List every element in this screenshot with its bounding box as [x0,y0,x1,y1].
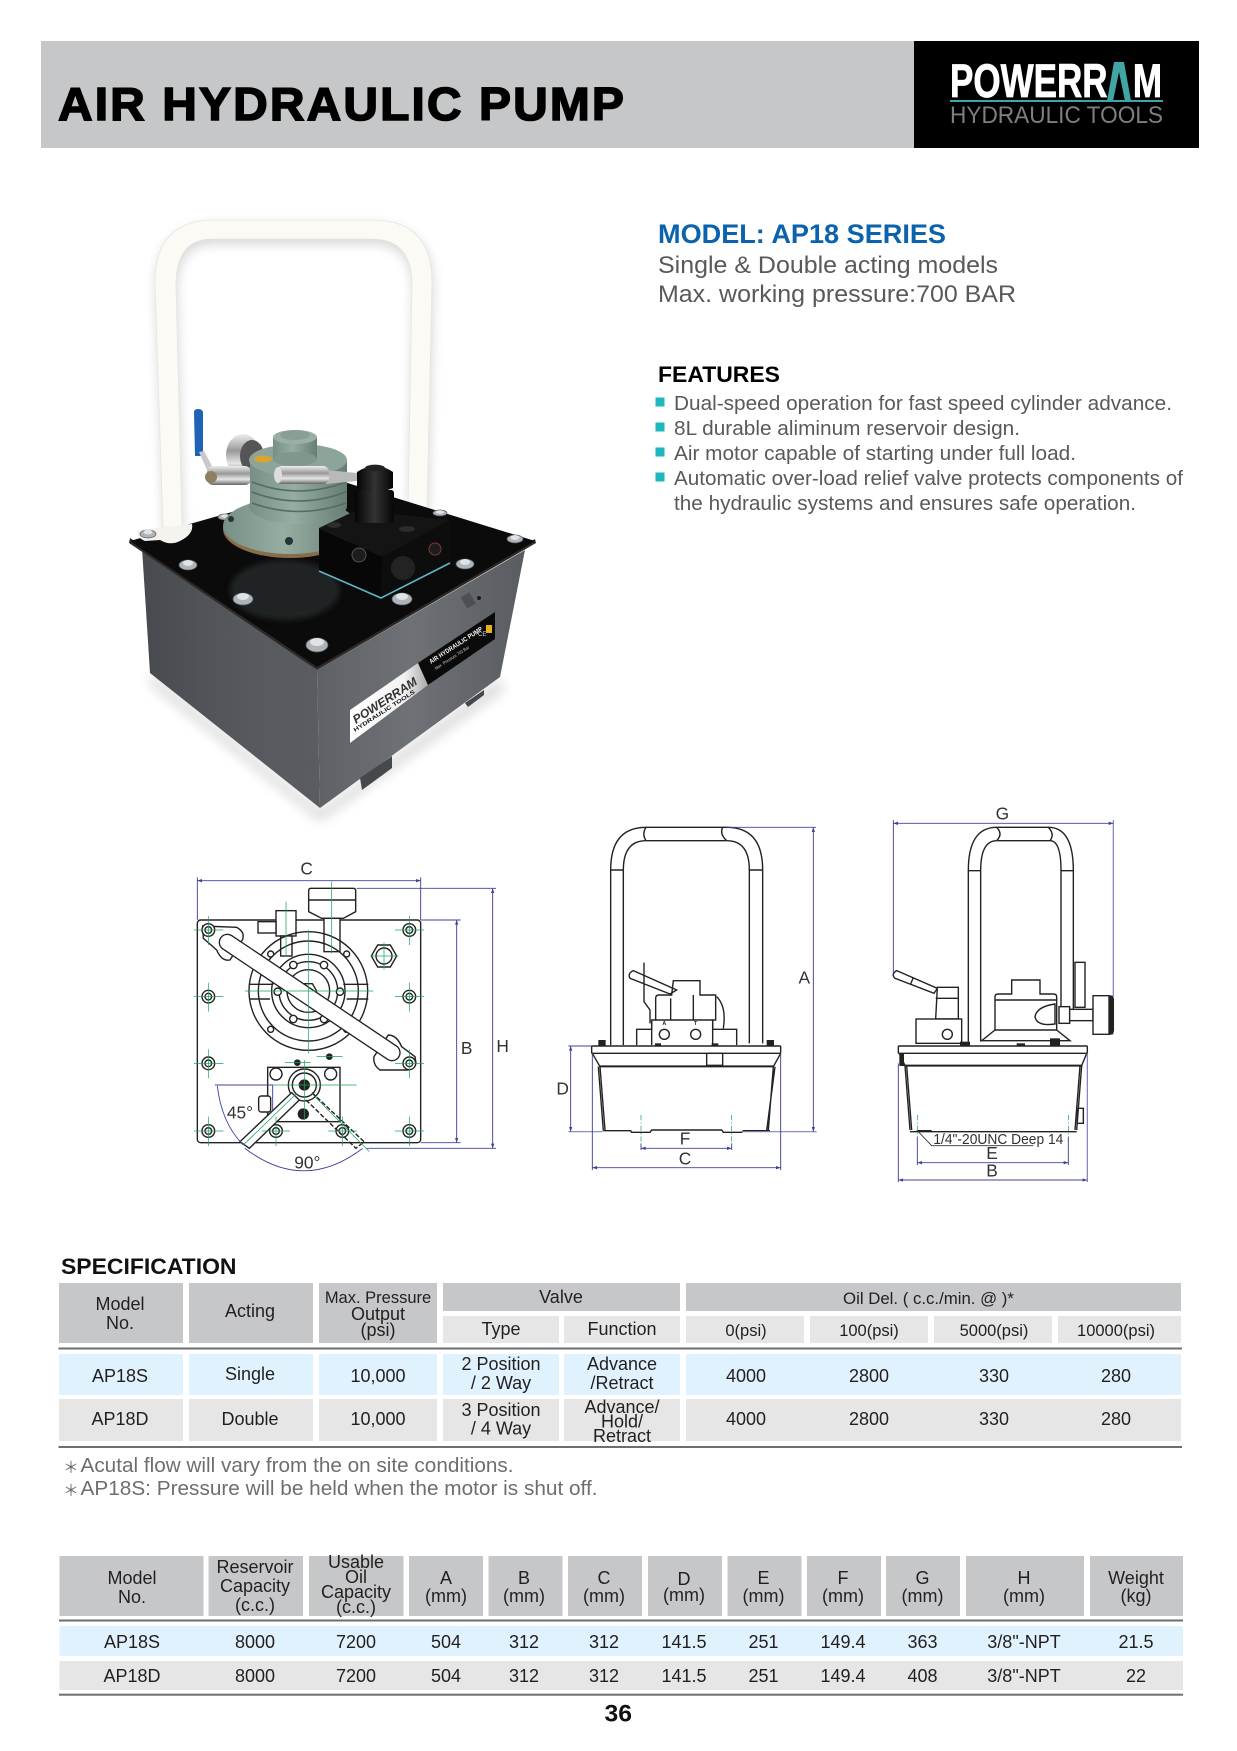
feature text: the hydraulic systems and ensures safe operation. [674,492,1136,515]
row AP18D: 251 [748,1666,779,1686]
blue ball valve and fittings [194,409,251,485]
footnotes: ＊ [63,1483,79,1500]
white carrying handle [155,220,432,527]
row AP18D: 3/8"-NPT [987,1666,1061,1686]
row AP18S: Single [225,1364,275,1384]
mounting bolts [202,924,416,1137]
row AP18S: /Retract [590,1373,654,1393]
lever and handle feet [203,926,416,1070]
page number: 36 [604,1700,632,1728]
brand logo: POWERRAM [950,54,1162,107]
table header text: F [838,1568,848,1588]
row AP18D: 504 [431,1666,461,1686]
row AP18S: 141.5 [661,1632,707,1652]
row AP18D: 408 [907,1666,938,1686]
dimensions [197,877,496,1171]
dimensions [568,827,817,1170]
features list [656,362,1183,515]
dimension labels: 90° [294,1152,320,1172]
dimension labels [556,967,811,1169]
table header text: Oil Del. ( c.c./min. @ )* [843,1289,1014,1308]
table header text: H [1018,1568,1030,1588]
pressure gauge [226,434,264,476]
row AP18D: 8000 [235,1666,275,1686]
row AP18D: 2800 [849,1409,889,1429]
feature text: 8L durable aliminum reservoir design. [674,417,1020,440]
black lid [129,481,536,670]
feature text: Dual-speed operation for fast speed cylinder advance. [674,392,1172,415]
POWERRAM body label [350,612,495,743]
dimension labels: E [986,1143,998,1163]
table header text: 0(psi) [725,1322,767,1340]
row AP18S: Advance [587,1354,657,1374]
dimensions table [59,1552,1183,1696]
dimension labels: B [986,1161,998,1181]
row AP18S: 312 [589,1632,619,1652]
table header text: Acting [225,1301,275,1321]
thread callout: 1/4"-20UNC Deep 14 [933,1132,1063,1148]
row AP18S: 2 Position [461,1354,541,1374]
row AP18S: 363 [907,1632,938,1652]
row AP18S: / 2 Way [471,1373,531,1393]
table header text: Weight [1108,1568,1164,1588]
table header text: Function [587,1319,657,1339]
motor and gauge [982,962,1113,1041]
table header text: C [598,1568,610,1588]
row AP18D: Hold/ [601,1412,643,1432]
row AP18S: 10,000 [350,1366,406,1386]
row AP18S: 312 [509,1632,539,1652]
valve block and lever positions [240,1053,364,1148]
table header text: B [518,1568,530,1588]
table header text: Output [351,1304,405,1324]
dimension labels: A [799,967,811,987]
brand logo [914,41,1199,148]
table header text: No. [106,1313,134,1333]
model name: MODEL: AP18 SERIES [658,219,946,249]
technical drawing: top view [194,858,509,1172]
POWERRAM body label: HYDRAULIC TOOLS [353,689,417,734]
row AP18S: 149.4 [820,1632,866,1652]
technical drawing: side view [893,803,1113,1182]
table header text: Type [481,1319,521,1339]
row AP18D: Advance/ [584,1397,660,1417]
POWERRAM body label: POWERRAM [350,674,421,727]
row AP18D: 22 [1126,1666,1146,1686]
handle [611,827,763,1045]
pump and valve: A [662,1021,666,1027]
dimension labels: G [996,803,1009,823]
brand logo: HYDRAULIC TOOLS [950,102,1163,129]
table header text: Model [95,1294,145,1314]
row AP18S: 251 [748,1632,779,1652]
row AP18S: 4000 [726,1366,766,1386]
model summary: Single & Double acting models [658,252,998,279]
row AP18S: 3/8"-NPT [987,1632,1061,1652]
reservoir [592,1040,781,1132]
row AP18S [104,1632,1154,1652]
row AP18S: 280 [1101,1366,1131,1386]
table header text: Max. Pressure [325,1289,431,1307]
dimension labels: C [679,1149,691,1169]
pump and valve: T [694,1021,698,1027]
lever and valve block [893,971,962,1043]
table header text: A [440,1568,452,1588]
bullets [656,398,664,482]
dimension labels: F [680,1129,690,1149]
table header text: (psi) [360,1320,396,1340]
row AP18D: AP18D [91,1409,149,1429]
row AP18D: 330 [979,1409,1009,1429]
row AP18D: 141.5 [661,1666,707,1686]
dimensions [893,820,1113,1182]
row AP18D: Double [221,1409,279,1429]
table header text: Usable [328,1552,384,1572]
row AP18D: 280 [1101,1409,1131,1429]
model summary: Max. working pressure:700 BAR [658,281,1016,308]
table header text: Capacity [220,1576,290,1596]
row AP18D: 149.4 [820,1666,866,1686]
table header text: Oil [345,1567,367,1587]
row AP18D: AP18D [103,1666,161,1686]
row AP18D: Retract [593,1426,651,1446]
table header text: 100(psi) [839,1322,899,1340]
table header text [107,1552,1164,1617]
table header text: (mm) [822,1586,864,1606]
handle [968,827,1073,1042]
table header text: 10000(psi) [1077,1322,1155,1340]
table header text [95,1287,1155,1340]
dimension labels: B [461,1038,472,1058]
table cell backgrounds [59,1556,1183,1696]
row AP18S: 330 [979,1366,1009,1386]
green air motor [223,430,357,558]
row AP18D: 312 [589,1666,619,1686]
row AP18S: AP18S [92,1366,148,1386]
table header text: (mm) [743,1586,784,1606]
dimension labels [986,803,1009,1181]
table header text: (mm) [425,1586,467,1606]
title: AIR HYDRAULIC PUMP [58,78,626,130]
row AP18S: 21.5 [1118,1632,1154,1652]
technical drawing: front view [556,827,817,1170]
table header text: (mm) [583,1586,625,1606]
POWERRAM body label: AIR HYDRAULIC PUMP [428,626,485,666]
dimension labels: D [556,1078,569,1098]
table header text: Valve [539,1287,583,1307]
centre lines [194,882,424,1152]
handle foot [137,524,192,543]
row AP18S [92,1354,1131,1393]
header banner [41,41,914,148]
table header text: No. [118,1587,146,1607]
specification table [58,1283,1182,1448]
table header text: (c.c.) [336,1597,376,1617]
POWERRAM body label: Max. Pressure 700 Bar [434,645,470,671]
dimension labels: H [496,1036,509,1056]
POWERRAM body label: CE [478,632,486,638]
dimension labels: C [300,858,313,878]
model heading block [658,219,1016,308]
dimension labels [227,858,509,1172]
reservoir [898,1038,1087,1132]
row AP18D: / 4 Way [471,1418,531,1438]
feature text: Automatic over-load relief valve protects components of [674,467,1183,490]
footnotes [63,1454,598,1500]
row AP18S: 8000 [235,1632,275,1652]
plate and motor [197,888,421,1143]
black control knob [355,465,394,523]
table header text: (c.c.) [235,1595,275,1615]
row AP18S: 504 [431,1632,461,1652]
feature text [674,392,1183,515]
table header text: Capacity [321,1582,391,1602]
valve block [319,465,450,598]
row AP18S: 7200 [336,1632,376,1652]
specification heading: SPECIFICATION [61,1254,236,1279]
footnotes: ＊ [63,1460,79,1477]
pump lever [274,466,367,484]
table header text: E [757,1568,770,1588]
features heading: FEATURES [658,362,780,387]
table header text: 5000(psi) [960,1322,1028,1340]
row AP18D [91,1397,1131,1446]
table header text: G [915,1568,930,1588]
table header text: Reservoir [216,1557,294,1577]
row AP18D [103,1666,1146,1686]
reservoir body [142,548,525,808]
table header text: (mm) [663,1585,705,1605]
row AP18S: AP18S [104,1632,160,1652]
feature text: Air motor capable of starting under full load. [674,442,1076,465]
table header text: (mm) [902,1586,943,1606]
model summary [658,252,1016,308]
row AP18D: 7200 [336,1666,376,1686]
soft shadows [156,225,433,532]
lid bolts [140,510,523,652]
row AP18D: 10,000 [350,1409,406,1429]
table header text: D [678,1569,690,1589]
table header text: (mm) [1003,1586,1045,1606]
pump and valve [629,963,737,1045]
table header text: Model [107,1568,157,1588]
table cell backgrounds [58,1283,1182,1448]
table header text: (kg) [1120,1586,1152,1606]
product photo: air hydraulic pump [129,220,536,822]
row AP18D: 4000 [726,1409,766,1429]
row AP18D: 3 Position [461,1400,541,1420]
dimension labels: 45° [227,1103,253,1123]
footnotes: Acutal flow will vary from the on site conditions. [80,1454,514,1477]
footnotes: AP18S: Pressure will be held when the motor is shut off. [80,1477,598,1500]
row AP18D: 312 [509,1666,539,1686]
table header text: (mm) [503,1586,545,1606]
row AP18S: 2800 [849,1366,889,1386]
